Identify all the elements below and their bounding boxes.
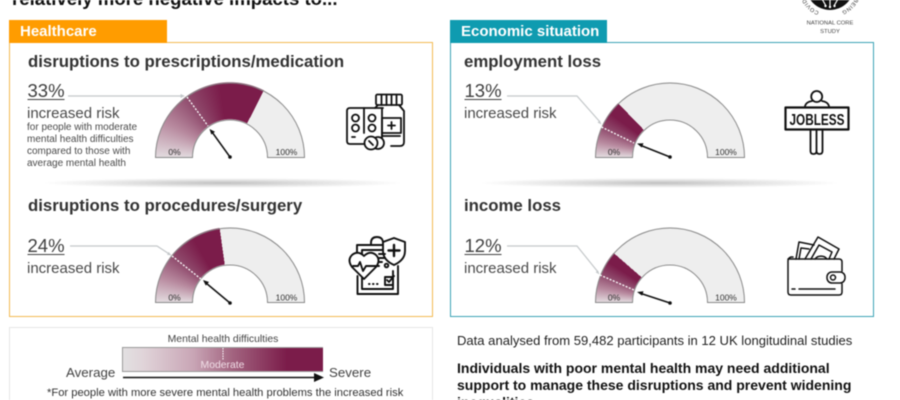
logo: COVID wellbeing national core study: NATIONAL CORE: [807, 20, 853, 26]
text: data source: Data analysed from 59,482 participants in 12 UK longitudinal studies: [457, 333, 852, 348]
logo: COVID wellbeing national core study: [802, 0, 859, 35]
gauge: prescriptions 33%: 0%: [168, 147, 181, 157]
text: conclusion: [457, 360, 852, 400]
legend: severe label: Severe: [329, 365, 371, 380]
label: increased risk: increased risk: [464, 104, 557, 122]
tab: economic situation: [450, 20, 607, 43]
gauge: prescriptions 33%: 100%: [276, 147, 298, 157]
panel: legend: [9, 327, 433, 400]
callout arrow: 12%: [506, 244, 600, 274]
divider shadow right: [482, 178, 837, 188]
stat: 12%: 12%: [464, 234, 502, 256]
text: comparison note: mental health difficulties: [27, 134, 134, 145]
gauge: income 12%: 0%: [608, 292, 621, 302]
legend: gradient bar: [122, 347, 323, 372]
callout arrow: 24%: [70, 244, 172, 256]
tab: healthcare: [9, 20, 167, 43]
gauge: income 12%: 100%: [715, 292, 737, 302]
stat: 24%: 24%: [28, 234, 65, 256]
gauge: income 12%: [594, 226, 746, 306]
logo: COVID wellbeing national core study: STUDY: [820, 29, 840, 35]
text: conclusion: Individuals with poor mental health may need additional: [457, 360, 830, 376]
legend: footnote: *For people with more severe mental health problems the increased risk: [47, 386, 403, 398]
panel border: healthcare: [9, 42, 433, 317]
legend: average label: Average: [66, 365, 115, 380]
icon: wallet: [786, 236, 847, 297]
panel: economic situation: [449, 19, 875, 318]
icon: medication: [345, 92, 406, 152]
gauge: employment 13%: [594, 82, 746, 160]
gauge: procedures 24%: 0%: [168, 292, 181, 302]
text: comparison note: average mental health: [27, 158, 126, 169]
gauge: procedures 24%: [154, 226, 306, 306]
legend: scale title: Mental health difficulties: [168, 334, 278, 345]
text: conclusion: support to manage these disruptions and prevent widening: [457, 377, 851, 393]
label: increased risk: increased risk: [464, 260, 557, 276]
panel border: economic: [450, 42, 874, 317]
tab: healthcare: Healthcare: [20, 23, 97, 40]
callout arrow: 13%: [506, 94, 602, 124]
tab: economic situation: Economic situation: [461, 23, 599, 40]
heading: income loss: income loss: [464, 196, 561, 215]
icon: medical record: [348, 235, 407, 296]
gauge: prescriptions 33%: [154, 81, 306, 160]
gauge: procedures 24%: 100%: [276, 292, 298, 302]
label: increased risk: increased risk: [27, 260, 120, 276]
icon: jobless sign: JOBLESS: [790, 112, 845, 129]
heading: employment loss: employment loss: [464, 52, 601, 71]
panel: healthcare: [8, 19, 434, 318]
stat: 13%: 13%: [464, 80, 502, 100]
stat: 33%: 33%: [28, 80, 65, 100]
label: increased risk: increased risk: [27, 104, 120, 122]
legend: moderate label: Moderate: [201, 360, 244, 371]
text: comparison note: compared to those with: [27, 146, 130, 157]
legend: arrow: [122, 372, 324, 382]
text: comparison note: for people with moderate: [27, 122, 137, 133]
callout arrow: 33%: [68, 94, 185, 98]
heading: prescriptions: disruptions to prescriptions/medication: [28, 52, 344, 71]
legend: moderate marker: [222, 348, 224, 360]
divider shadow left: [45, 178, 400, 188]
text: comparison note: [26, 122, 138, 169]
heading: procedures: disruptions to procedures/surgery: [28, 196, 302, 215]
icon: jobless sign: [784, 89, 850, 156]
gauge: employment 13%: 100%: [715, 147, 737, 157]
gauge: employment 13%: 0%: [608, 147, 621, 157]
